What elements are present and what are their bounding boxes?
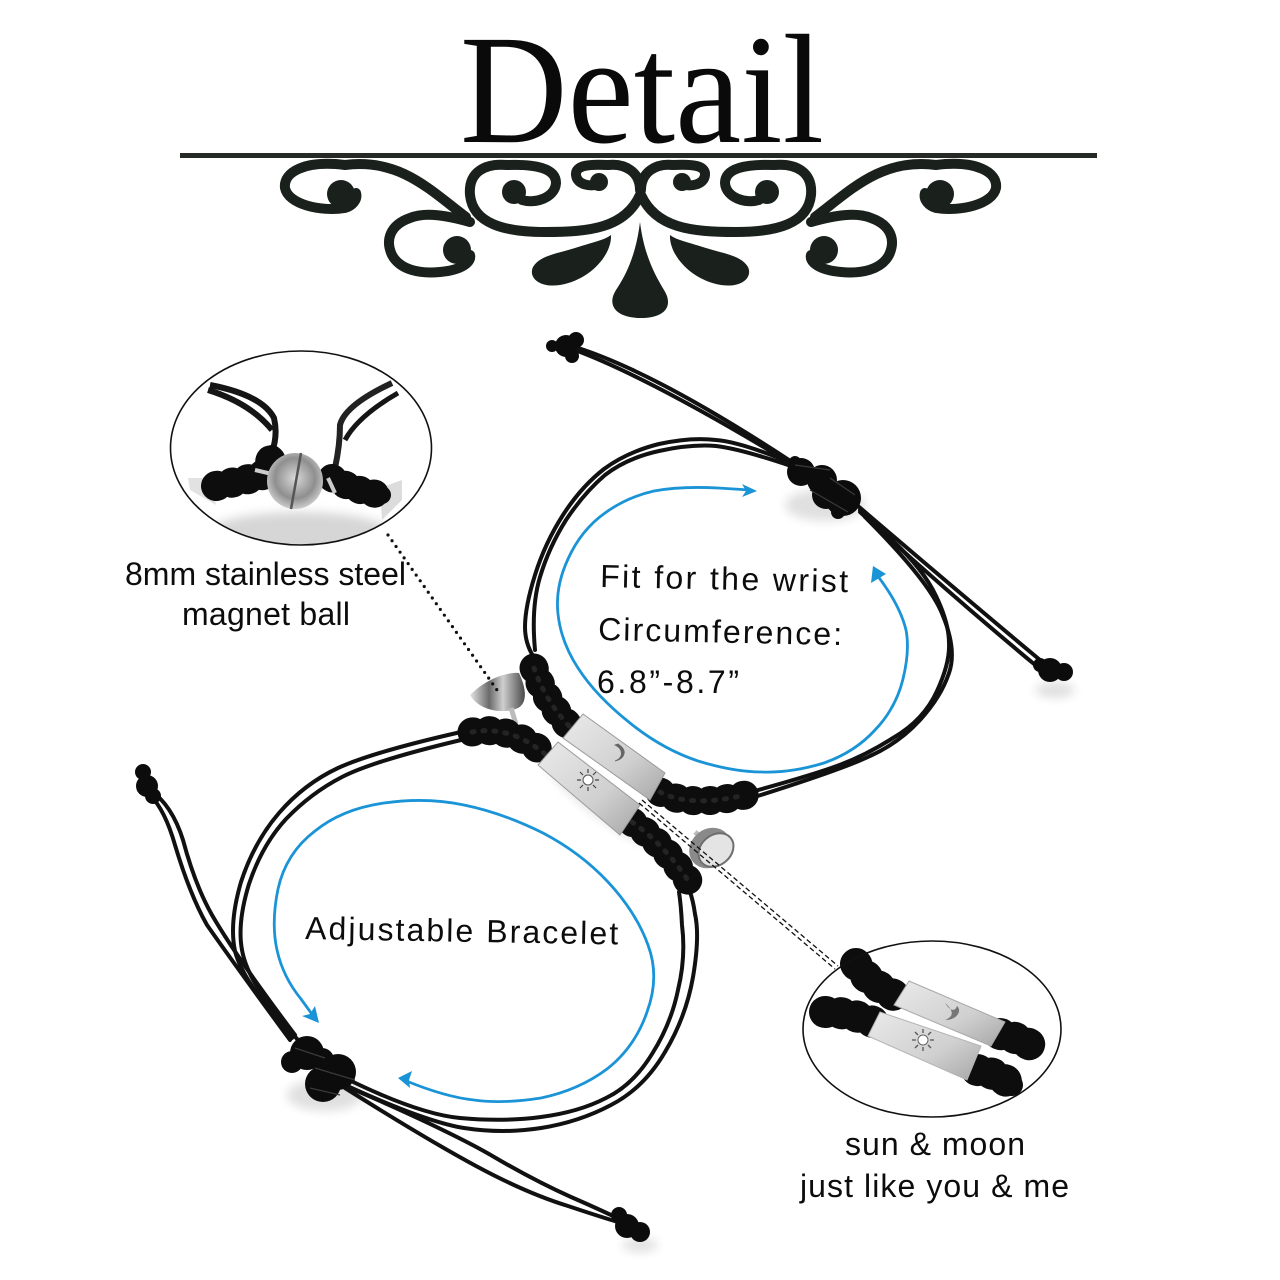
sun charm bar [538,742,640,835]
bracelet pieces in the inset [825,964,1032,1085]
disc magnet half [681,819,740,877]
lower tail knots [135,764,650,1242]
magnet ball caption: 8mm stainless steel [125,556,406,592]
sun and moon caption: sun & moon [845,1126,1025,1162]
adjustable bracelet text: Adjustable Bracelet [305,910,619,951]
magnet ball caption: magnet ball [182,596,350,632]
wrist fit arrow [557,484,907,772]
sun and moon caption: just like you & me [799,1168,1069,1204]
adjustable arrow [274,800,654,1102]
tail knots [546,332,1073,682]
divider rule [180,153,1097,158]
upper braids [534,668,745,801]
dotted leader to magnet ball [388,535,497,690]
sliding knot [787,456,861,519]
upper bracelet cords [525,347,1040,800]
wrist fit text: 6.8”-8.7” [597,664,739,700]
inset outline [170,351,432,545]
page canvas [126,34,1097,1254]
lower bracelet [135,731,740,1242]
dome magnet half [470,673,525,724]
dashed leader to charm bars [639,800,838,969]
title: Detail [460,3,824,176]
wrist fit text: Circumference: [598,611,843,652]
lower braids [472,731,689,882]
sun and moon caption [799,1126,1069,1204]
ornamental flourish [285,164,996,318]
wrist fit text [597,558,849,700]
magnet ball caption [125,556,406,632]
inset clip contents [188,383,402,552]
wrist fit text: Fit for the wrist [600,558,849,599]
inset outline [803,941,1061,1117]
upper bracelet [470,332,1073,801]
moon charm bar [563,714,665,800]
lower sliding knot [281,1036,356,1102]
inset: magnet ball [170,351,432,552]
lower bracelet cords [150,732,697,1224]
soft shadows under the bracelets [287,489,1075,1252]
inset: sun and moon bars [803,941,1061,1117]
